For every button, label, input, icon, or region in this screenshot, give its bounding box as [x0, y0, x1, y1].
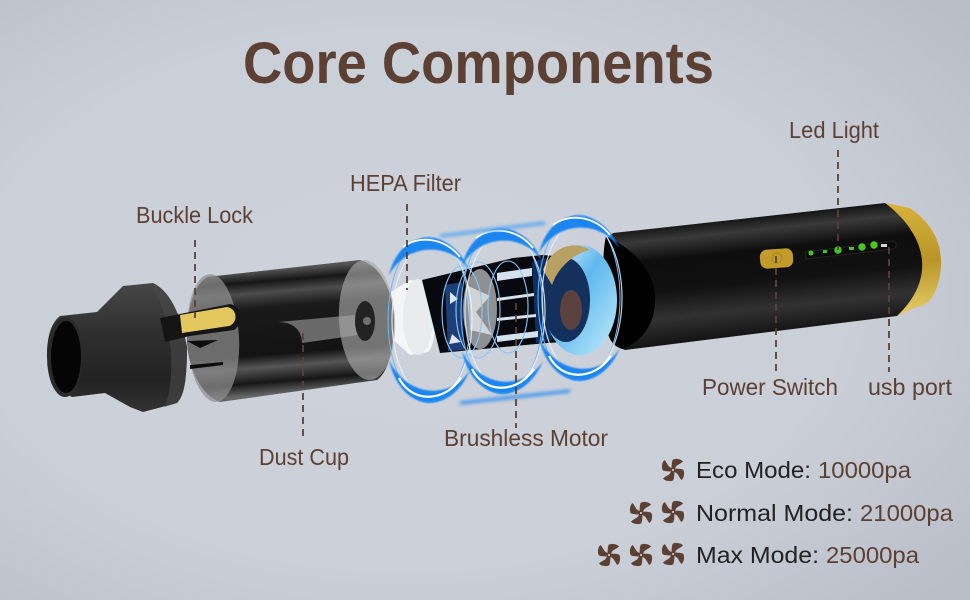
vacuum body	[603, 203, 941, 350]
label: dust cup: Dust Cup	[259, 444, 349, 470]
buckle lock	[160, 304, 240, 369]
label: power switch: Power Switch	[702, 374, 838, 400]
label: usb port: usb port	[868, 374, 953, 400]
hepa filter	[391, 279, 446, 355]
max mode row	[598, 542, 919, 568]
dust cup	[184, 259, 398, 403]
label: buckle lock: Buckle Lock	[136, 202, 253, 228]
normal mode row: Normal Mode:	[696, 500, 853, 526]
max mode row: 25000pa	[826, 542, 919, 568]
normal mode row	[630, 500, 953, 526]
label: hepa filter: HEPA Filter	[350, 170, 461, 196]
eco mode row: 10000pa	[818, 457, 911, 483]
max mode row: Max Mode:	[696, 542, 819, 568]
eco mode row: Eco Mode:	[696, 457, 811, 483]
label: brushless motor: Brushless Motor	[444, 425, 608, 451]
nozzle	[47, 283, 187, 412]
title: Core Components	[243, 31, 714, 96]
normal mode row: 21000pa	[860, 500, 953, 526]
led light strip	[805, 241, 896, 259]
leader lines	[195, 150, 889, 436]
airflow rings	[388, 215, 622, 403]
brushless motor	[422, 245, 617, 358]
label: led light: Led Light	[789, 117, 880, 143]
eco mode row	[662, 457, 911, 483]
power switch button	[759, 248, 794, 269]
